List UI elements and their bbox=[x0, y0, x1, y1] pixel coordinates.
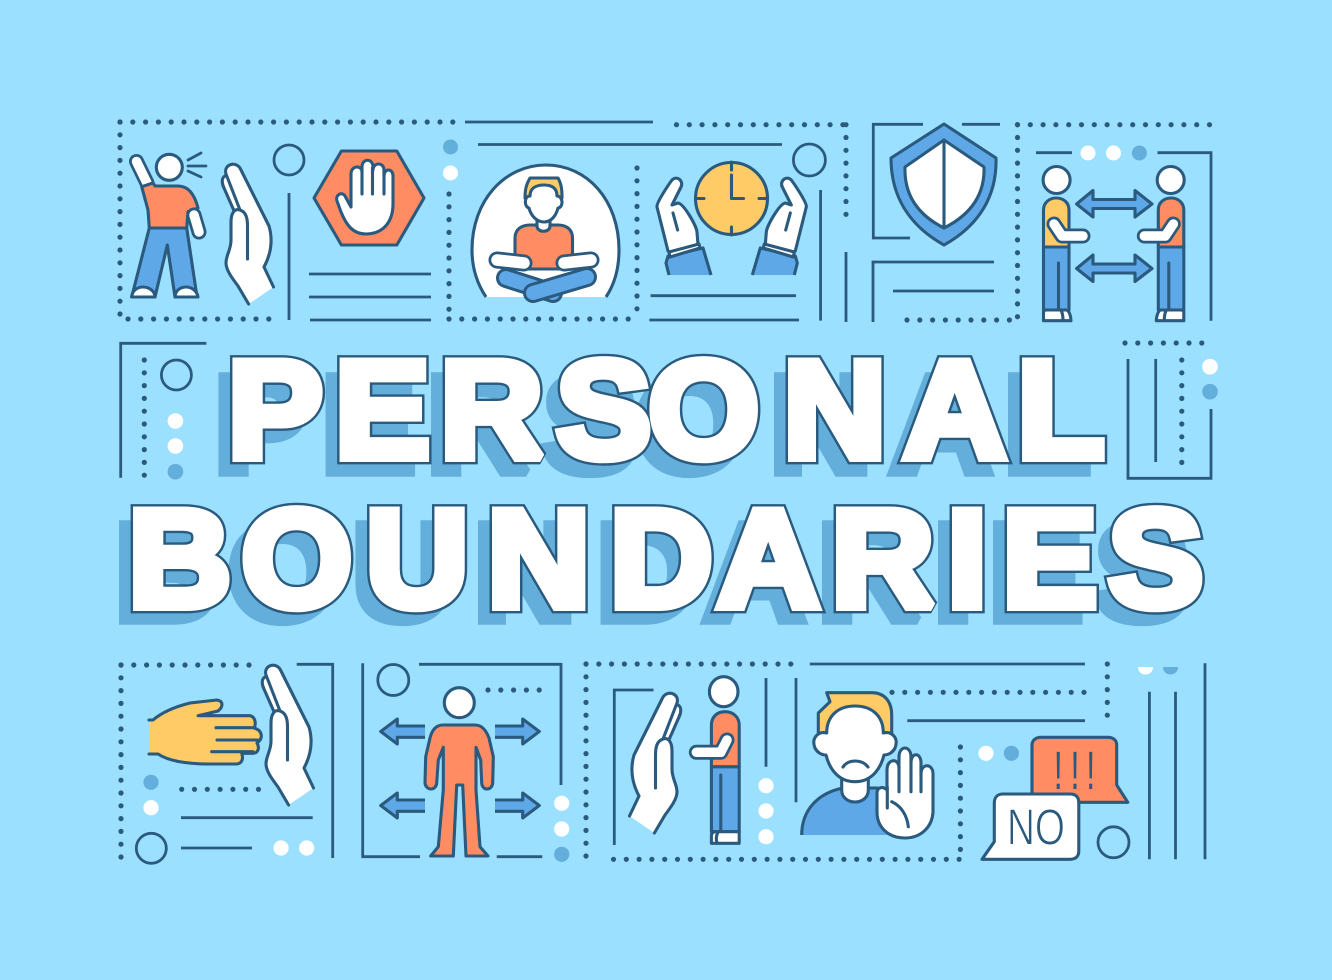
right middle decoration bbox=[1125, 343, 1218, 478]
arrow up left bbox=[381, 719, 425, 744]
title: Personal Boundaries: PERSONAL bbox=[214, 347, 1090, 502]
icon: yellow hand reaching toward open palm bbox=[149, 700, 261, 764]
arrow down right bbox=[495, 793, 539, 818]
icon: stop hand in hexagon bbox=[314, 151, 424, 245]
left hand and cuff bbox=[657, 178, 711, 275]
icon: shouting person with raised arm bbox=[132, 153, 206, 297]
icon: protective shield bbox=[891, 124, 996, 245]
standing person bbox=[696, 677, 739, 843]
white bubble with NO: NO bbox=[1007, 798, 1065, 856]
icon: two people keeping distance bbox=[1043, 166, 1184, 321]
left middle decoration bbox=[121, 343, 206, 480]
icon: person with personal space arrows bbox=[381, 688, 539, 856]
white bubble with NO bbox=[982, 794, 1079, 859]
orange bubble with exclamation marks bbox=[1032, 737, 1128, 802]
bottom frame lines and dots bbox=[121, 663, 1205, 869]
right person bbox=[1144, 166, 1184, 321]
arrow up right bbox=[495, 719, 539, 744]
left person bbox=[1043, 166, 1083, 321]
title: Personal Boundaries bbox=[114, 332, 1203, 650]
icon: sad person raising stop hand bbox=[802, 693, 933, 838]
mirrored open palm bbox=[630, 693, 681, 833]
title: Personal Boundaries: PERSONAL bbox=[228, 332, 1104, 487]
icon: clock held by two hands bbox=[657, 162, 806, 275]
title: Personal Boundaries: PERSONAL bbox=[228, 332, 1104, 487]
icon: speech bubbles saying no bbox=[982, 737, 1128, 859]
arrow down left bbox=[381, 793, 425, 818]
title: Personal Boundaries: BOUNDARIES bbox=[128, 481, 1203, 636]
double arrow bottom bbox=[1077, 255, 1152, 282]
top frame lines and dots bbox=[120, 122, 1214, 322]
double arrow top bbox=[1077, 190, 1152, 217]
icon: stopping hand (bottom left) bbox=[262, 665, 314, 805]
icon: raised open hand bbox=[222, 164, 274, 304]
title: Personal Boundaries: BOUNDARIES bbox=[114, 495, 1189, 650]
title: Personal Boundaries: BOUNDARIES bbox=[128, 481, 1203, 636]
icon: hand blocking standing person bbox=[630, 677, 739, 843]
right hand and cuff bbox=[752, 178, 806, 275]
orange bubble with exclamation marks: !!! bbox=[1054, 742, 1095, 801]
icon: meditating person in protective dome bbox=[472, 165, 619, 297]
